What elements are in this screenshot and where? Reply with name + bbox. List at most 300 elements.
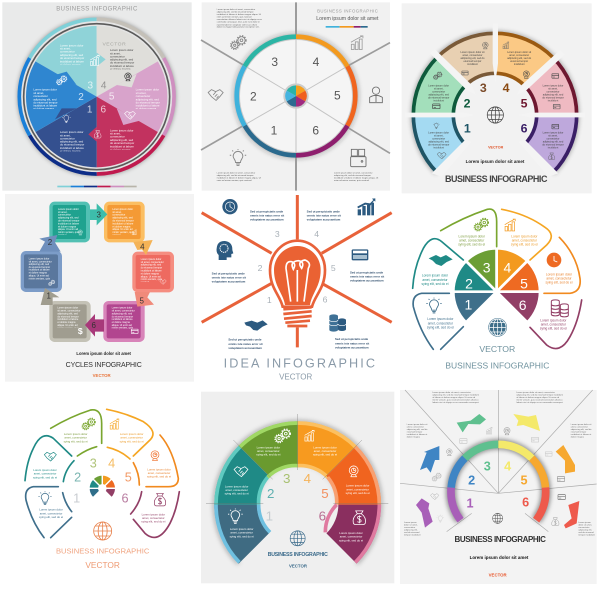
step numbers [266, 471, 329, 524]
box 4 [104, 202, 145, 242]
step numbers: 5 [125, 470, 132, 484]
text: segment 1: sying elit, sed do ei [230, 535, 254, 538]
icon: gears [474, 218, 488, 231]
panel: cycles infographic [5, 194, 194, 382]
arrow: blue [420, 446, 439, 473]
text: segment 1: amet, consectetur [40, 512, 62, 515]
icon: money [552, 518, 559, 526]
segment 1 [214, 505, 270, 564]
text: bottom left: Lorem ipsum dolor sit amet, consectetur adipiscing elit, sed do eiusmod tempor incididunt ut labore et dolore magna aliqua. Ut enim ad minim veniam, quis nostrud. [217, 172, 261, 182]
text: top left: omnis iste natus error sit [250, 214, 284, 217]
arrow 6 [85, 314, 104, 337]
icon: lock [462, 71, 468, 75]
text: segment 4: sying elit, sed do ei [313, 453, 337, 456]
step numbers: 5 [321, 486, 329, 501]
label: vector: VECTOR [479, 344, 515, 354]
outline 5 [544, 237, 580, 293]
outline 1 [413, 293, 463, 349]
icon: webcam [151, 451, 159, 460]
wedges [453, 248, 540, 322]
text: middle left: omnis iste natus error sit [212, 276, 246, 279]
step numbers: 4 [503, 260, 511, 276]
text: segment 1: Lorem ipsum dolor [39, 508, 63, 511]
step numbers: 6 [522, 495, 529, 509]
step numbers: 3 [271, 55, 278, 69]
title: BUSINESS INFOGRAPHIC [56, 7, 138, 13]
step numbers: 2 [464, 97, 471, 111]
outline 2 [413, 239, 463, 288]
icon: clock [447, 449, 452, 456]
icon: money [94, 131, 101, 138]
step numbers: 1 [464, 296, 472, 312]
icon: handshake [430, 494, 439, 500]
icon: chart [305, 430, 314, 441]
text: segment 5: amet, consectetur [346, 488, 369, 491]
step numbers: 2 [465, 275, 473, 291]
icon: handshake [437, 152, 446, 159]
step numbers: 3 [96, 210, 101, 219]
subtitle: Lorem ipsum dolor sit amet [316, 16, 379, 22]
step numbers: 4 [314, 229, 319, 239]
text: lower right: Lorem ipsum dolor sit amet, consectetur adipiscing elit, sed do eiusmod tempor incididunt [578, 521, 595, 536]
text: middle left [212, 271, 253, 285]
icon: handshake [44, 452, 56, 461]
segment 5 [326, 446, 381, 505]
step numbers: 3 [275, 229, 280, 239]
arrow 5 [135, 292, 154, 307]
icon: bulb [230, 149, 246, 165]
icon: chart [110, 419, 119, 429]
icon: briefcase [557, 477, 565, 481]
outline 5 [133, 435, 178, 487]
text: right: Lorem ipsum dolor sit amet, consectetur adipiscing elit, sed do eiusmod tempor incididunt ut labore et dolore magna [571, 423, 591, 438]
label: vector: VECTOR [102, 41, 126, 47]
text: segment 5 [343, 484, 373, 497]
step numbers: 3 [88, 81, 94, 92]
text: segment 2: Lorem ipsum dolor [33, 468, 57, 472]
icon: gears [49, 280, 55, 286]
arc segment 3 [465, 444, 498, 458]
box 6 [103, 301, 145, 342]
outline 4 [107, 409, 153, 459]
icon: handshake [125, 111, 135, 119]
subtitle: Lorem ipsum dolor sit amet [76, 351, 132, 356]
arc segment 1 [451, 488, 461, 520]
light bulb [270, 241, 325, 326]
text: segment 4: amet, consectetur [314, 449, 336, 453]
step numbers: 6 [521, 122, 528, 136]
step numbers [466, 460, 529, 510]
icon: mail [545, 452, 552, 456]
text: segment 3: Lorem ipsum dolor [459, 235, 485, 238]
outline 2 [25, 436, 74, 482]
text: segment 6: amet, consectetur [541, 323, 566, 326]
text: segment 4: amet, consectetur [120, 436, 143, 439]
step numbers: 4 [140, 243, 145, 252]
title: CYCLES INFOGRAPHIC [66, 362, 142, 369]
text: middle right: omnis iste natus error sit [350, 275, 384, 278]
step numbers: 4 [101, 81, 107, 92]
icon: gears [432, 473, 441, 481]
text: segment 5: Lorem ipsum dolor [346, 484, 369, 487]
title: BUSINESS INFOGRAPHIC [455, 535, 546, 544]
step numbers: 5 [109, 91, 115, 102]
icon: monitor [460, 439, 467, 443]
box 2 [21, 251, 62, 292]
globe [493, 513, 503, 523]
text: segment 4: amet, consectetur [512, 239, 537, 242]
icon: chart [503, 42, 509, 49]
step numbers: 4 [503, 81, 510, 95]
step numbers: 5 [331, 263, 336, 273]
arrow: green [457, 414, 486, 432]
step numbers: 6 [91, 321, 96, 330]
text: segment 2: amet, consectetur [422, 278, 448, 282]
step numbers: 4 [504, 460, 511, 474]
text: top right: voluptatem accusantium [307, 218, 340, 221]
arc segment 6 [536, 488, 546, 520]
text: segment 3: amet, consectetur [257, 449, 280, 453]
text: segment 4: sying elit, sed do ei [511, 243, 538, 247]
icon: headset [504, 428, 510, 435]
icon: handshake [234, 467, 248, 477]
text: segment 5: sying elit, sed do ei [546, 281, 572, 285]
text: lower left: Lorem ipsum dolor sit amet, consectetur adipiscing elit, sed do eiusmod tempor incididunt [404, 521, 420, 536]
colour strip [57, 186, 137, 187]
text: segment 6: sying elit, sed do ei [141, 520, 165, 523]
icon: printer [531, 437, 539, 442]
segment 3 [437, 33, 495, 86]
centre pie [283, 83, 309, 109]
segment 2 [214, 446, 269, 505]
text: segment 3: amet, consectetur [64, 436, 87, 439]
step numbers: 1 [271, 123, 278, 137]
panel: filled half ring [201, 392, 394, 583]
step numbers: 1 [87, 104, 93, 115]
icon: credit card [352, 249, 368, 260]
text: segment 4 [310, 446, 340, 458]
title: BUSINESS INFOGRAPHIC [268, 552, 328, 558]
step numbers [464, 81, 528, 136]
text: top left [250, 209, 292, 223]
icon: chart [351, 36, 363, 49]
text: segment 3 [57, 432, 94, 445]
text: segment 6 [135, 513, 172, 525]
text: segment 4: Lorem ipsum dolor [120, 432, 143, 436]
text: segment 2: Lorem ipsum dolor [225, 485, 248, 488]
step numbers: 3 [484, 460, 491, 474]
text: segment 1 [227, 527, 257, 540]
label: vector: VECTOR [279, 373, 312, 382]
box 3 [49, 202, 90, 242]
icon: clock [78, 230, 82, 235]
text: bottom right: voluptatem accusantium [335, 346, 369, 349]
text: segment 2 [417, 274, 453, 287]
step numbers [258, 229, 336, 305]
panel: circular puzzle infographic [2, 2, 192, 191]
step numbers: 1 [73, 491, 80, 505]
icon: webcam [349, 466, 358, 477]
text: top right: Sed ut perspiciatis unde [307, 210, 340, 213]
outline 3 [441, 209, 497, 247]
arc segment 4 [498, 444, 532, 458]
colour bar [326, 26, 368, 28]
text: segment 1: Lorem ipsum dolor [427, 317, 453, 321]
text: segment 3: sying elit, sed do ei [256, 453, 280, 456]
small centre pie [89, 475, 116, 498]
text: top right [307, 209, 348, 223]
text: segment 3: sying elit, sed do ei [64, 440, 88, 443]
text: top right: Lorem ipsum dolor sit amet, consectetur adipiscing elit, sed do eiusmod tempor incididunt ut labore et dolore magna aliqua. Ut enim ad minim veniam, quis nostrud exercitation ullamco laboris nisi ut aliquip ex ea commodo consequat. [516, 391, 563, 404]
icon: bulb [38, 491, 52, 504]
icon: mail [553, 104, 560, 109]
text: segment 5 [141, 468, 177, 480]
panel: idea infographic [202, 195, 392, 382]
subtitle: Lorem ipsum dolor sit amet [470, 555, 529, 560]
text: top left: Lorem ipsum dolor sit amet, consectetur adipiscing elit, sed do eiusmod tempor incididunt ut labore et dolore magna aliqua. Ut enim ad minim veniam, quis nostrud exercitation ullamco laboris nisi ut aliquip ex ea commodo consequat. Duis aute irure dolor in reprehenderit in voluptate velit esse cillum dolore eu fugiat nulla pariatur excepteur sint. [217, 8, 262, 28]
icon: wallet [351, 149, 366, 167]
icon: gears [231, 36, 246, 49]
icon: money [154, 493, 166, 506]
segment 5 [524, 57, 577, 115]
text: bottom left: omnis iste natus error sit [228, 342, 263, 345]
text: segment 2 [27, 468, 63, 481]
text: segment 2: sying elit, sed do ei [225, 492, 249, 495]
step numbers: 4 [304, 471, 312, 486]
text: segment 2: sying elit, sed do ei [422, 282, 448, 286]
panel: segmented half ring with separators [402, 3, 592, 193]
step numbers [46, 210, 145, 330]
text: bottom left: voluptatem accusantium [228, 346, 262, 350]
icon: bulb [437, 515, 444, 522]
text: segment 5: sying elit, sed do ei [147, 475, 171, 478]
text: segment 1: sying elit, sed do ei [427, 326, 454, 329]
text: segment 6: amet, consectetur [142, 516, 165, 520]
segment 4 [495, 33, 553, 86]
step numbers: 4 [108, 456, 115, 470]
label: vector: VECTOR [85, 560, 120, 570]
arc segment 2 [451, 458, 465, 488]
step numbers: 3 [483, 260, 491, 276]
title: BUSINESS INFOGRAPHIC [56, 547, 150, 556]
text: bottom right: omnis iste natus error sit [335, 341, 369, 345]
arrow 2 [39, 235, 61, 252]
step numbers: 1 [464, 122, 471, 136]
icon: growth chart [357, 198, 375, 215]
icon: person [370, 87, 382, 103]
text: segment 1: sying elit, sed do ei [39, 515, 63, 519]
text: segment 5: Lorem ipsum dolor [147, 468, 171, 471]
text: segment 4: Lorem ipsum dolor [511, 235, 537, 238]
step numbers: 6 [319, 509, 326, 524]
text: segment 5: amet, consectetur [148, 471, 170, 475]
segment 6 [524, 115, 577, 173]
step numbers [73, 456, 132, 505]
panel: ring with radial lines [201, 2, 390, 191]
step numbers: 6 [323, 295, 328, 305]
panel: outline segments with small pie [25, 409, 179, 570]
icon: bulb [433, 122, 439, 129]
text: segment 6 [535, 319, 572, 332]
text: bottom left [228, 338, 270, 351]
text: bottom right: Lorem ipsum dolor sit amet, consectetur adipiscing elit, sed do eiusmod tempor incididunt ut labore et dolore magna aliqua. Ut enim ad minim veniam, quis nostrud. [334, 172, 378, 182]
text: segment 2: sying elit, sed do ei [33, 476, 57, 479]
title: BUSINESS INFOGRAPHIC [445, 362, 550, 371]
box 1 [49, 301, 91, 342]
arrow: yellow [513, 414, 540, 431]
text: top right: omnis iste natus error sit [307, 214, 341, 217]
text: left: Lorem ipsum dolor sit amet, consectetur adipiscing elit, sed do eiusmod tempor incididunt ut labore et dolore magna [407, 423, 427, 438]
text: segment 1: amet, consectetur [230, 531, 253, 534]
text: middle left: Sed ut perspiciatis unde [212, 272, 245, 275]
text: segment 6: sying elit, sed do ei [540, 327, 567, 331]
icon: card [558, 495, 565, 499]
segment 4 [298, 421, 357, 477]
text: middle left: voluptatem accusantium [212, 280, 245, 283]
text: segment 3 [453, 235, 490, 248]
step numbers: 2 [250, 89, 257, 103]
arrow 1 [41, 288, 59, 305]
step numbers: 1 [466, 496, 474, 510]
text: top left: Lorem ipsum dolor sit amet, consectetur adipiscing elit, sed do eiusmod tempor incididunt ut labore et dolore magna aliqua. Ut enim ad minim veniam, quis nostrud exercitation ullamco laboris nisi ut aliquip ex ea commodo consequat. [432, 391, 479, 404]
step numbers: 3 [283, 471, 290, 486]
step numbers: 4 [313, 55, 320, 69]
globe [487, 107, 503, 123]
icon: card [552, 124, 559, 129]
icon: headset [523, 71, 529, 78]
text: segment 2: amet, consectetur [34, 472, 56, 475]
text: top left: Sed ut perspiciatis unde [250, 210, 283, 213]
title: BUSINESS INFOGRAPHIC [317, 8, 378, 13]
outline 4 [502, 209, 551, 260]
text: segment 6: Lorem ipsum dolor [540, 319, 566, 322]
icon: clock [125, 73, 131, 81]
arrow 4 [133, 240, 153, 255]
icon: recycle [160, 280, 166, 284]
text: segment 4: Lorem ipsum dolor sit amet, consectetur adipiscing elit, sed do eiusmod tempor incididunt [507, 51, 531, 66]
text: segment 4 [113, 432, 150, 445]
icon: chart [90, 55, 99, 65]
title: BUSINESS INFOGRAPHIC [445, 174, 548, 184]
step numbers: 1 [266, 509, 273, 524]
outline 3 [51, 410, 102, 456]
icon: bulb [228, 509, 243, 523]
step numbers: 2 [48, 238, 53, 247]
arc segment 5 [532, 458, 545, 488]
text: segment 3: Lorem ipsum dolor [257, 446, 280, 449]
step numbers: 3 [90, 456, 97, 470]
icon: gears [57, 76, 67, 85]
step numbers: 2 [468, 474, 475, 488]
text: middle right: Sed ut perspiciatis unde [350, 271, 383, 274]
icon: gears [82, 418, 95, 430]
text: segment 4 [506, 235, 543, 248]
globe [488, 318, 507, 337]
text: segment 3: Lorem ipsum dolor [64, 432, 87, 436]
icon: clock [547, 253, 561, 267]
text: segment 2: amet, consectetur [225, 488, 248, 492]
text: segment 3: amet, consectetur [459, 239, 484, 242]
icon: gears [433, 72, 442, 79]
step numbers: 5 [334, 89, 341, 103]
step numbers [78, 81, 115, 115]
outline 6 [530, 300, 582, 349]
icon: handshake [244, 320, 268, 331]
step numbers: 5 [520, 474, 528, 488]
text: segment 1 [422, 317, 459, 331]
step numbers: 2 [258, 263, 263, 273]
icon: coins [329, 314, 346, 332]
text: segment 5: Lorem ipsum dolor [546, 273, 572, 276]
step numbers: 5 [521, 97, 528, 111]
text: segment 3: sying elit, sed do ei [458, 243, 485, 247]
step numbers: 1 [267, 295, 272, 305]
step numbers: 6 [519, 297, 527, 313]
text: bottom right: Sed ut perspiciatis unde [335, 337, 368, 341]
icon: handshake [208, 90, 223, 100]
step numbers [250, 55, 341, 137]
step numbers: 3 [480, 81, 487, 95]
arrow: orange [556, 445, 575, 473]
box 5 [132, 252, 174, 292]
text: segment 1: Lorem ipsum dolor [230, 527, 253, 531]
arrow: red [564, 501, 579, 528]
text: middle right: voluptatem accusantium [350, 279, 384, 282]
icon: money [353, 511, 366, 524]
text: subtitle: Lorem ipsum dolor sit amet [466, 159, 525, 164]
text: bottom left: Sed ut perspiciatis unde [228, 338, 261, 341]
text: vector: VECTOR [488, 145, 504, 149]
icon: gears [275, 429, 290, 443]
text: top left: voluptatem accusantium [250, 218, 284, 221]
text: segment 3: Lorem ipsum dolor sit amet, consectetur adipiscing elit, sed do eiusmod tempor incididunt [461, 51, 484, 66]
text: segment 5: sying elit, sed do ei [346, 491, 370, 495]
text: segment 2 [222, 485, 252, 497]
arrow 3 [90, 203, 107, 225]
step numbers: 2 [74, 470, 81, 484]
title: IDEA INFOGRAPHIC [224, 356, 375, 370]
step numbers: 6 [312, 123, 319, 137]
icon: monitor [433, 104, 440, 109]
icon: clock [222, 199, 238, 214]
text: segment 4: sying elit, sed do ei [120, 440, 144, 443]
icon: chart [505, 219, 515, 231]
icon: handshake [429, 255, 453, 266]
text: segment 3 [253, 446, 283, 458]
segment 2 [413, 57, 466, 115]
icon: clock [483, 42, 488, 49]
segment 6 [325, 505, 381, 564]
step numbers [464, 260, 528, 313]
globe [94, 522, 112, 540]
arrow: purple [416, 498, 433, 528]
step numbers: 1 [46, 292, 51, 301]
text: segment 6: sying elit, sed do ei [339, 539, 363, 542]
outline 6 [131, 492, 179, 537]
text: segment 6: Lorem ipsum dolor [142, 513, 165, 516]
segment 3 [239, 421, 298, 477]
text: segment 2: Lorem ipsum dolor [422, 274, 448, 278]
icon: head with gear [217, 241, 233, 260]
outline 1 [26, 487, 72, 538]
panel: rainbow arc with arrows [400, 390, 597, 584]
icon: card [131, 329, 138, 334]
text: segment 5 [541, 273, 577, 286]
text: segment 1 [33, 508, 69, 521]
step numbers: 5 [520, 275, 528, 291]
icon: printer [552, 74, 559, 78]
icon: bulb [62, 114, 71, 123]
